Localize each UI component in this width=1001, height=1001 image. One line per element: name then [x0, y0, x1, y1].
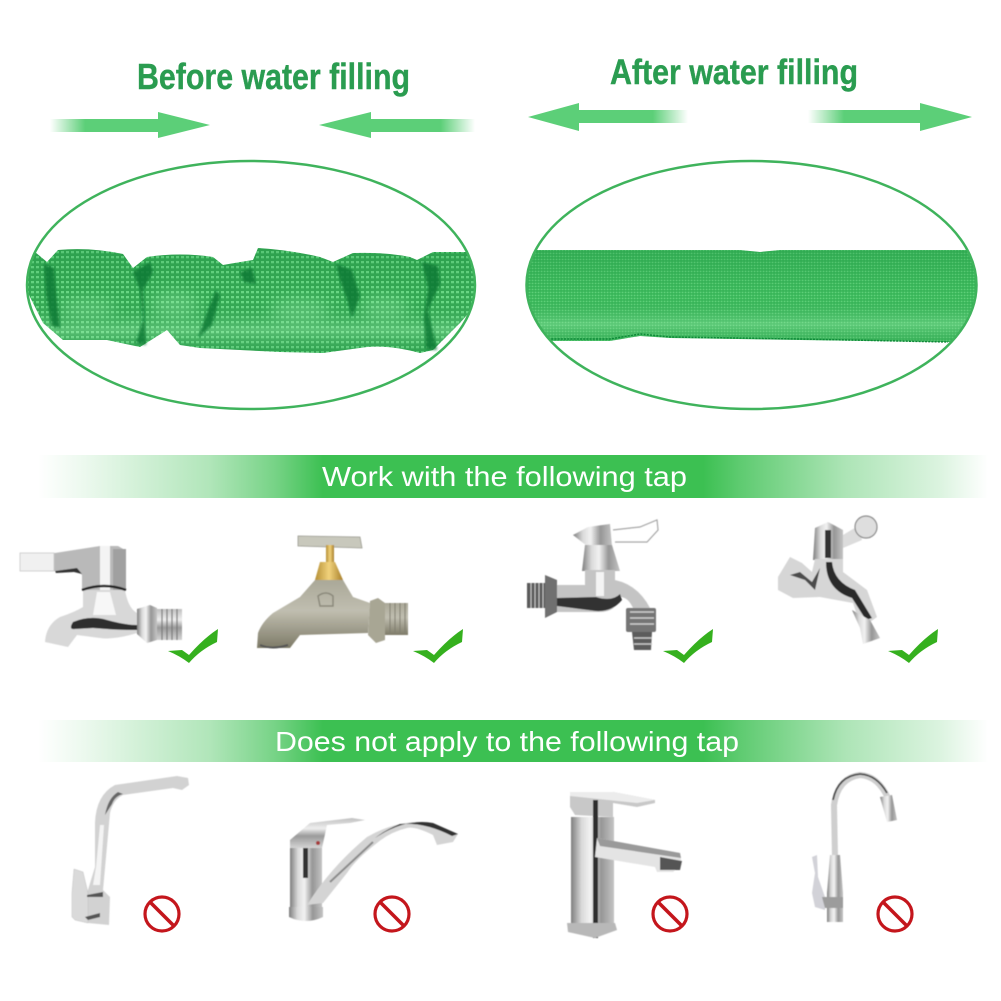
hose: dark folds — [44, 262, 440, 350]
panel: expanded hose in oval — [520, 161, 985, 409]
tap 1: chrome lever bib tap — [20, 546, 182, 647]
prohibited sign 4 — [878, 897, 912, 931]
check mark 2 — [413, 629, 463, 663]
panel: compressed hose in oval — [25, 161, 480, 409]
hose: highlights — [60, 291, 409, 322]
check mark 1 — [168, 629, 218, 663]
banner: work with the following tap — [38, 455, 988, 498]
arrow: before, pointing right — [50, 112, 210, 138]
hose: smooth tube — [520, 250, 985, 345]
tap 4: chrome tap with round knob — [778, 516, 880, 644]
tap 6: mixer with long curved spout — [289, 818, 458, 921]
title: before water filling: Before water filling — [137, 56, 410, 97]
title: after water filling: After water filling — [610, 53, 858, 92]
check mark 4 — [888, 629, 938, 663]
tap 5: kitchen square spout — [72, 776, 189, 925]
hose: wrinkled fabric — [25, 248, 480, 353]
oval outline — [526, 161, 976, 409]
oval outline — [27, 161, 475, 409]
banner: work with the following tap: Work with the following tap — [322, 461, 687, 492]
tap 3: chrome tap with hose connector — [527, 520, 658, 650]
arrow: after, pointing right — [808, 103, 972, 131]
prohibited sign 3 — [653, 897, 687, 931]
check mark 3 — [663, 629, 713, 663]
banner: does not apply to the following tap — [38, 720, 988, 762]
prohibited sign 2 — [375, 897, 409, 931]
arrow: before, pointing left — [319, 112, 475, 138]
prohibited sign 1 — [145, 897, 179, 931]
tap 2: cast iron tap with brass stem — [257, 536, 408, 648]
tap 7: square basin mixer — [567, 792, 682, 938]
banner: does not apply to the following tap: Does not apply to the following tap — [275, 726, 739, 757]
tap 8: gooseneck kitchen mixer — [812, 774, 897, 922]
arrow: after, pointing left — [528, 103, 688, 131]
